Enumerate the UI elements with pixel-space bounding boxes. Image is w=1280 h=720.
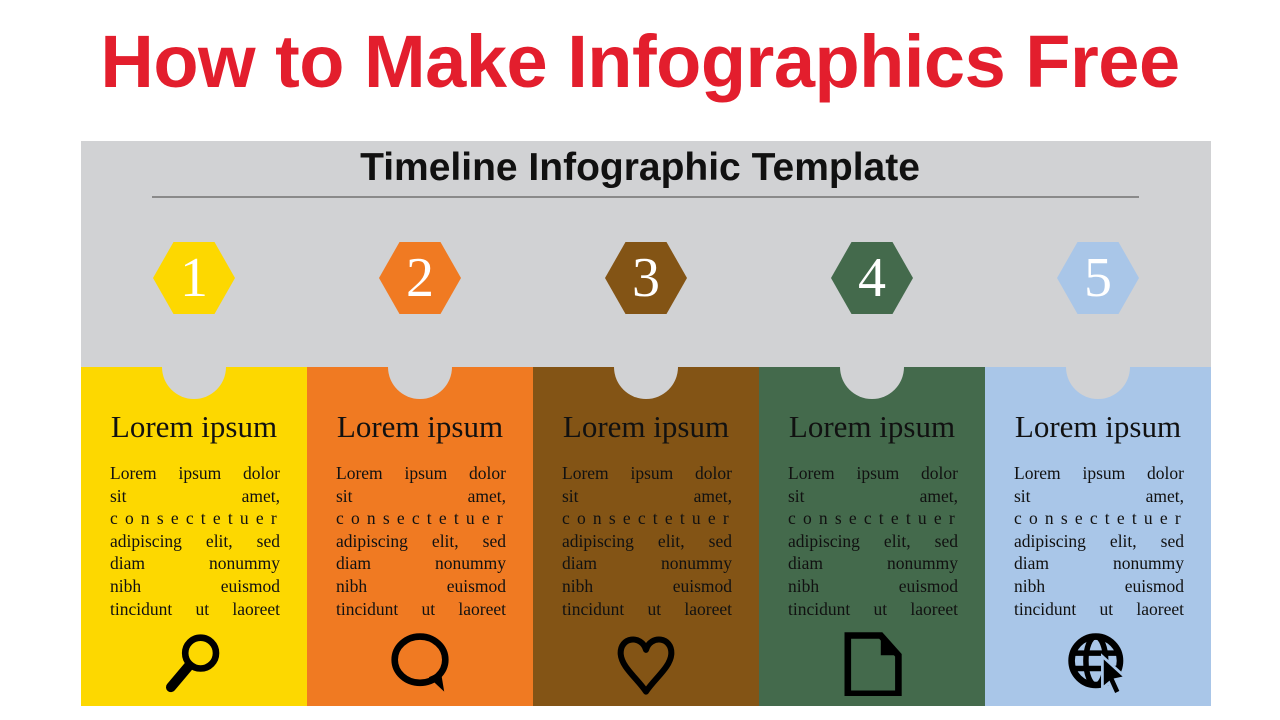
- hexagon 2: 2: [406, 247, 434, 309]
- panel: column 2: sit amet,: [336, 486, 506, 506]
- hexagon 5: [1057, 242, 1139, 314]
- panel: column 5: Lorem ipsum dolor: [1014, 463, 1184, 483]
- panel: column 1: [81, 367, 307, 706]
- panel: column 5: consectetuer: [1014, 508, 1188, 528]
- panel: column 3: tincidunt ut laoreet: [562, 599, 732, 619]
- panel: column 3: nibh euismod: [562, 576, 732, 596]
- panel: column 3: adipiscing elit, sed: [562, 531, 732, 551]
- icon: magnifier: [166, 634, 220, 692]
- panel: column 4: tincidunt ut laoreet: [788, 599, 958, 619]
- panel: column 1: Lorem ipsum dolor: [110, 463, 280, 483]
- panel: column 5: sit amet,: [1014, 486, 1184, 506]
- panel: column 4: adipiscing elit, sed: [788, 531, 958, 551]
- icon: document: [844, 632, 902, 696]
- hexagon 4: [831, 242, 913, 314]
- panel: column 5: nibh euismod: [1014, 576, 1184, 596]
- panel: column 4: diam nonummy: [788, 553, 958, 573]
- title: How to Make Infographics Free: [100, 20, 1180, 103]
- panel: column 1: diam nonummy: [110, 553, 280, 573]
- panel: column 5: tincidunt ut laoreet: [1014, 599, 1184, 619]
- panel: column 1: Lorem ipsum: [111, 409, 277, 444]
- hexagon 2: [379, 242, 461, 314]
- panel: column 2: consectetuer: [336, 508, 510, 528]
- panel: column 2: diam nonummy: [336, 553, 506, 573]
- panel: column 4: nibh euismod: [788, 576, 958, 596]
- panel: column 1: sit amet,: [110, 486, 280, 506]
- panel: column 5: Lorem ipsum: [1015, 409, 1181, 444]
- icon: speech bubble: [391, 633, 449, 692]
- panel: column 3: Lorem ipsum: [563, 409, 729, 444]
- panel: column 3: Lorem ipsum dolor: [562, 463, 732, 483]
- icon: heart: [618, 636, 674, 695]
- hexagon 1: 1: [180, 247, 208, 309]
- panel: column 5: adipiscing elit, sed: [1014, 531, 1184, 551]
- panel: column 2: Lorem ipsum: [337, 409, 503, 444]
- icon: globe with cursor: [1068, 633, 1124, 693]
- panel: column 3: diam nonummy: [562, 553, 732, 573]
- hexagon 3: [605, 242, 687, 314]
- hexagon 3: 3: [632, 247, 660, 309]
- panel: column 1: adipiscing elit, sed: [110, 531, 280, 551]
- subtitle: Timeline Infographic Template: [360, 146, 920, 189]
- hexagon 5: 5: [1084, 247, 1112, 309]
- panel: column 3: sit amet,: [562, 486, 732, 506]
- panel: column 2: nibh euismod: [336, 576, 506, 596]
- panel: column 4: [759, 367, 985, 706]
- panel: column 1: tincidunt ut laoreet: [110, 599, 280, 619]
- panel: column 2: tincidunt ut laoreet: [336, 599, 506, 619]
- panel: column 1: consectetuer: [110, 508, 284, 528]
- panel: column 5: [985, 367, 1211, 706]
- panel: column 3: [533, 367, 759, 706]
- panel: header band: [81, 141, 1211, 368]
- hexagon 4: 4: [858, 247, 886, 309]
- panel: column 2: [307, 367, 533, 706]
- panel: column 4: Lorem ipsum dolor: [788, 463, 958, 483]
- panel: column 4: consectetuer: [788, 508, 962, 528]
- hexagon 1: [153, 242, 235, 314]
- panel: column 1: nibh euismod: [110, 576, 280, 596]
- panel: column 4: Lorem ipsum: [789, 409, 955, 444]
- panel: column 5: diam nonummy: [1014, 553, 1184, 573]
- panel: column 2: Lorem ipsum dolor: [336, 463, 506, 483]
- panel: column 2: adipiscing elit, sed: [336, 531, 506, 551]
- panel: column 3: consectetuer: [562, 508, 736, 528]
- panel: column 4: sit amet,: [788, 486, 958, 506]
